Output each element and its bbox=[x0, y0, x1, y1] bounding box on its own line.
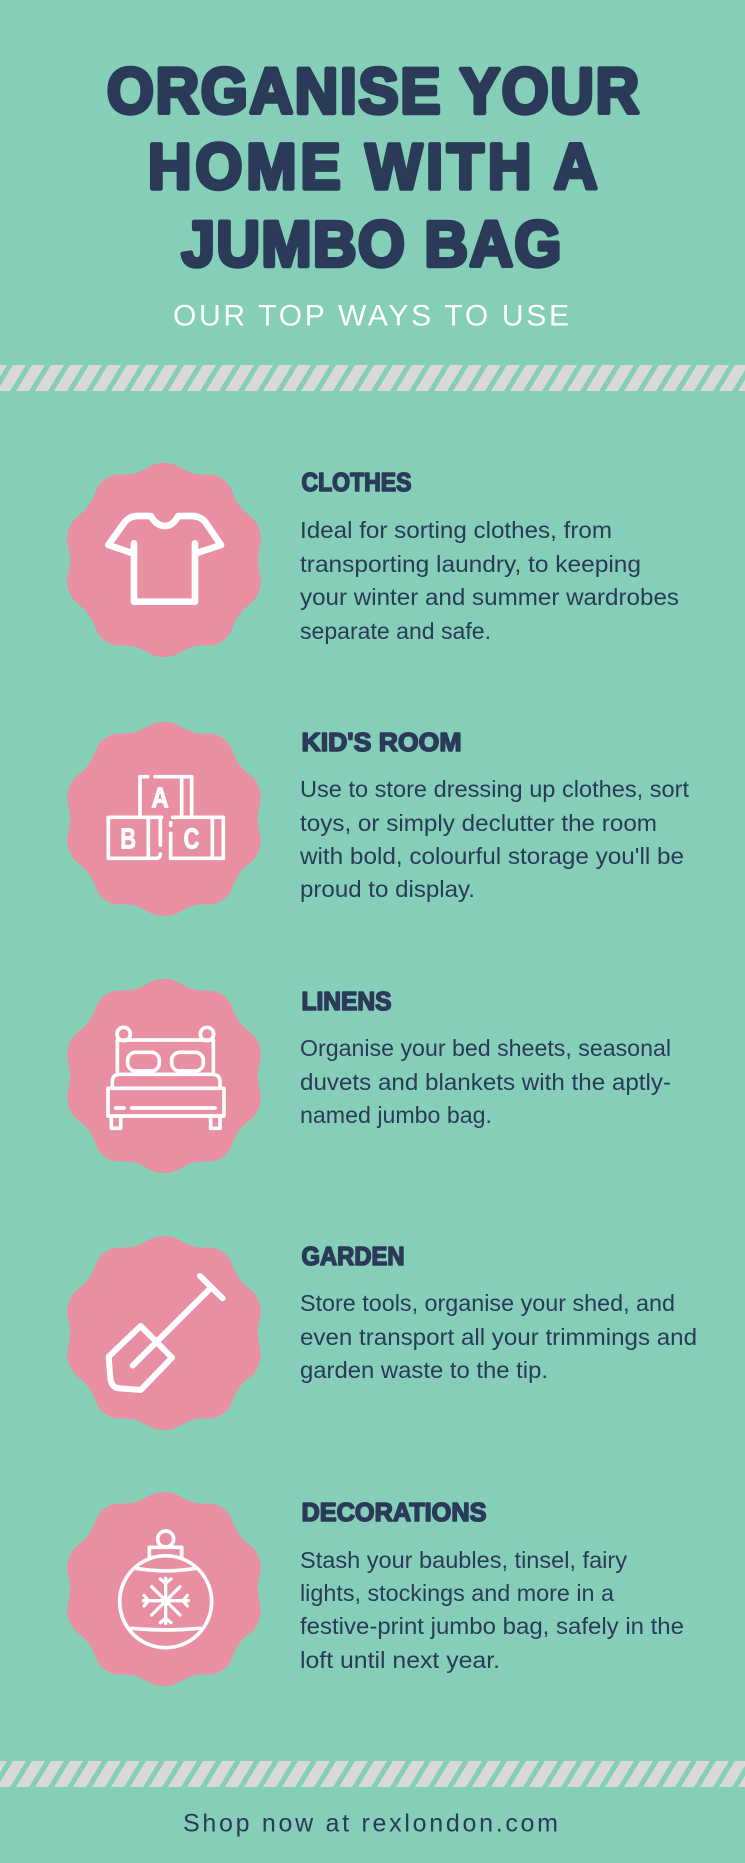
body text: linens: named jumbo bag. bbox=[300, 1102, 492, 1128]
body text: kid's room: proud to display. bbox=[300, 876, 475, 902]
panel: linens bbox=[67, 979, 671, 1173]
body text: kid's room: toys, or simply declutter the room bbox=[300, 810, 657, 836]
icon: bed badge bbox=[67, 979, 261, 1173]
body text: linens: duvets and blankets with the aptly- bbox=[300, 1069, 671, 1095]
title: HOME WITH A bbox=[148, 132, 597, 203]
icon: t-shirt badge bbox=[67, 463, 261, 657]
body text: decorations: Stash your baubles, tinsel, fairy bbox=[300, 1547, 627, 1573]
body text: clothes: Ideal for sorting clothes, from bbox=[300, 517, 612, 543]
subtitle: OUR TOP WAYS TO USE bbox=[173, 300, 569, 332]
panel: decorations bbox=[67, 1492, 684, 1686]
icon: alphabet blocks badge bbox=[67, 722, 261, 916]
icon: shovel badge bbox=[67, 1236, 261, 1430]
heading: clothes: CLOTHES bbox=[302, 467, 412, 497]
body text: garden: even transport all your trimmings and bbox=[300, 1324, 697, 1350]
heading: garden: GARDEN bbox=[302, 1241, 404, 1271]
body text: garden: Store tools, organise your shed, and bbox=[300, 1290, 675, 1316]
title bbox=[107, 56, 639, 280]
title: JUMBO BAG bbox=[182, 209, 561, 280]
body text: clothes: your winter and summer wardrobes bbox=[300, 584, 679, 610]
panel: clothes bbox=[67, 463, 679, 657]
panel: garden bbox=[67, 1236, 697, 1430]
body text: clothes: transporting laundry, to keeping bbox=[300, 551, 641, 577]
body text: clothes: separate and safe. bbox=[300, 618, 491, 644]
body text: kid's room bbox=[299, 776, 689, 902]
heading: kid's room: KID'S ROOM bbox=[302, 727, 462, 757]
panel: kid's room bbox=[67, 722, 689, 916]
body text: garden bbox=[300, 1290, 697, 1383]
body text: decorations bbox=[300, 1547, 684, 1673]
icon: bauble badge bbox=[67, 1492, 261, 1686]
body text: kid's room: Use to store dressing up clothes, sort bbox=[300, 776, 689, 802]
body text: decorations: loft until next year. bbox=[300, 1647, 500, 1673]
body text: clothes bbox=[300, 517, 679, 644]
icon: alphabet blocks badge: B bbox=[120, 823, 136, 855]
icon: alphabet blocks badge: A bbox=[151, 782, 169, 814]
footer link text: Shop now at rexlondon.com bbox=[183, 1810, 558, 1838]
icon: alphabet blocks badge: C bbox=[184, 823, 199, 855]
body text: decorations: lights, stockings and more in a bbox=[300, 1580, 615, 1606]
body text: linens: Organise your bed sheets, seasonal bbox=[300, 1035, 671, 1061]
heading: linens: LINENS bbox=[302, 986, 392, 1016]
title: ORGANISE YOUR bbox=[107, 56, 639, 127]
heading: decorations: DECORATIONS bbox=[302, 1497, 486, 1527]
body text: garden: garden waste to the tip. bbox=[300, 1357, 548, 1383]
body text: kid's room: with bold, colourful storage you'll be bbox=[299, 843, 684, 869]
body text: decorations: festive-print jumbo bag, safely in the bbox=[300, 1613, 684, 1639]
body text: linens bbox=[300, 1035, 671, 1128]
